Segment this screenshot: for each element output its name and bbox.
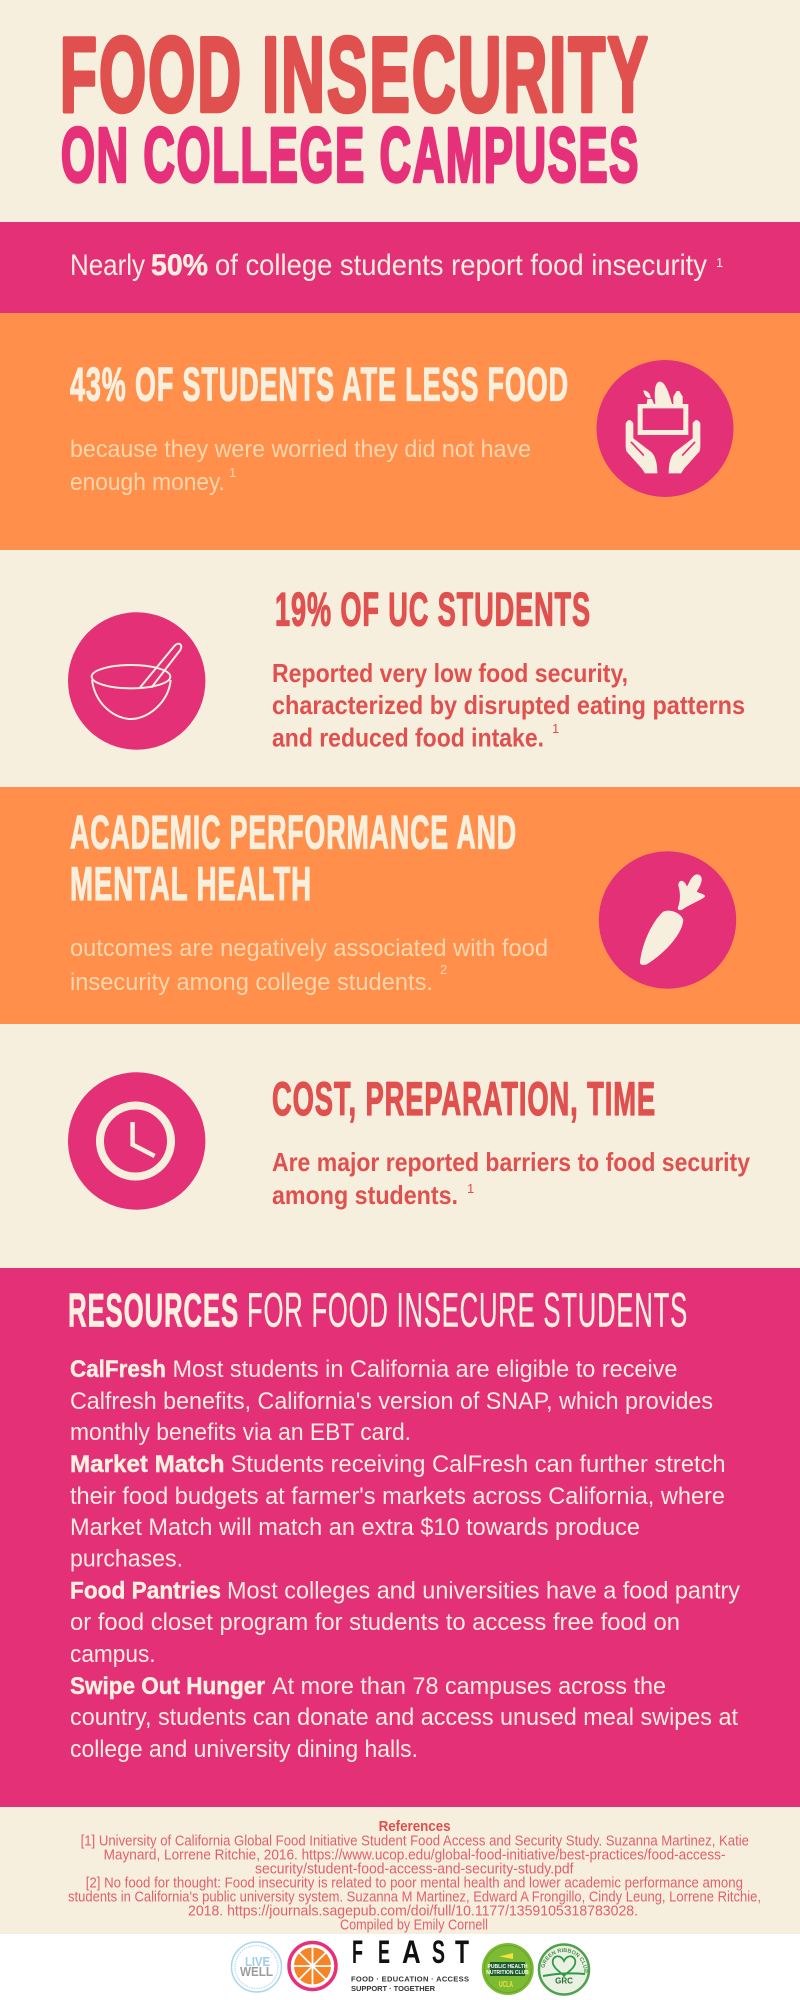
resource: Market Match: purchases. bbox=[70, 1546, 183, 1572]
statistic text: 1 bbox=[716, 255, 723, 270]
heading bbox=[70, 806, 517, 910]
resource: Swipe Out Hunger: country, students can donate and access unused meal swipes at bbox=[70, 1704, 738, 1731]
compiled by credit: Compiled by Emily Cornell bbox=[340, 1916, 488, 1933]
reference 1 bbox=[81, 1833, 749, 1878]
statistic text: Nearly bbox=[70, 249, 145, 282]
panel: title bbox=[0, 0, 800, 222]
logo: Live Well: LIVE bbox=[245, 1954, 270, 1969]
logo: Live Well bbox=[232, 1942, 282, 1992]
icon: bowl and spoon bbox=[68, 612, 205, 750]
logo: FEAST: S bbox=[432, 1934, 445, 1970]
resource: Swipe Out Hunger: Swipe Out Hunger bbox=[70, 1673, 265, 1700]
description text: 2 bbox=[440, 962, 447, 977]
panel: 50% statistic banner bbox=[0, 222, 800, 313]
description text: 1 bbox=[552, 721, 559, 736]
icon: carrot bbox=[599, 851, 736, 989]
panel: resources bbox=[0, 1268, 800, 1807]
resources heading: RESOURCES bbox=[68, 1284, 239, 1336]
heading: MENTAL HEALTH bbox=[70, 857, 312, 910]
icon: hands holding groceries bbox=[596, 360, 734, 497]
logo: FEAST bbox=[351, 1934, 469, 1993]
panel: 43% of students bbox=[0, 313, 800, 550]
panel: cost, preparation, time bbox=[0, 1024, 800, 1268]
resource: Market Match: their food budgets at farmer's markets across California, where bbox=[70, 1483, 725, 1510]
logo: Public Health Nutrition Club bbox=[482, 1943, 534, 1995]
description text: outcomes are negatively associated with food bbox=[70, 935, 548, 962]
description text: Reported very low food security, bbox=[272, 658, 628, 688]
reference 2 bbox=[68, 1874, 761, 1919]
panel: references bbox=[0, 1807, 800, 1934]
description text bbox=[272, 1147, 750, 1210]
resource: Market Match bbox=[70, 1451, 726, 1572]
logo row bbox=[230, 1934, 590, 1996]
logo: Public Health Nutrition Club: PUBLIC HEALTH bbox=[488, 1964, 528, 1970]
logo: FEAST: T bbox=[455, 1934, 469, 1970]
resource: Food Pantries: or food closet program for students to access free food on bbox=[70, 1609, 680, 1636]
references heading: References bbox=[379, 1818, 451, 1835]
logo: FEAST: SUPPORT · TOGETHER bbox=[351, 1984, 436, 1993]
description text bbox=[70, 436, 531, 496]
resource: Market Match: Market Match will match an extra $10 towards produce bbox=[70, 1514, 640, 1541]
resource: Swipe Out Hunger: At more than 78 campuses across the bbox=[272, 1673, 666, 1700]
panel: academic performance and mental health bbox=[0, 787, 800, 1024]
logo: Green Ribbon Club: GRC bbox=[555, 1976, 573, 1986]
resource: Swipe Out Hunger bbox=[70, 1673, 738, 1763]
description text: enough money. bbox=[70, 469, 225, 496]
description text: because they were worried they did not have bbox=[70, 436, 531, 463]
reference 1: Maynard, Lorrene Ritchie, 2016. https://www.ucop.edu/global-food-initiative/best-practices/food-access- bbox=[104, 1847, 726, 1864]
description text: 1 bbox=[229, 465, 236, 480]
icon: clock bbox=[68, 1072, 205, 1210]
resource: Food Pantries bbox=[70, 1578, 740, 1668]
resource: Food Pantries: Most colleges and universities have a food pantry bbox=[227, 1578, 740, 1604]
description text: Are major reported barriers to food security bbox=[272, 1147, 750, 1177]
logo: FEAST: A bbox=[402, 1934, 421, 1970]
logo: FEAST: FOOD · EDUCATION · ACCESS bbox=[351, 1975, 469, 1984]
reference 2: 2018. https://journals.sagepub.com/doi/full/10.1177/1359105318783028. bbox=[188, 1902, 638, 1919]
resource: Food Pantries: Food Pantries bbox=[70, 1578, 221, 1604]
logo: FEAST: E bbox=[378, 1934, 390, 1970]
logo: Live Well: WELL bbox=[240, 1964, 273, 1979]
logo: orange slice bbox=[289, 1942, 336, 1990]
description text: among students. bbox=[272, 1180, 458, 1210]
logo: FEAST: F bbox=[352, 1934, 363, 1970]
panel: 19% of UC students bbox=[0, 550, 800, 787]
logo: Green Ribbon Club bbox=[538, 1943, 590, 1996]
statistic text: 50% bbox=[151, 249, 208, 282]
resource: CalFresh: Most students in California are eligible to receive bbox=[172, 1356, 678, 1383]
resource: CalFresh: Calfresh benefits, California's version of SNAP, which provides bbox=[70, 1388, 713, 1415]
resource: Food Pantries: campus. bbox=[70, 1641, 156, 1668]
description text: and reduced food intake. bbox=[272, 722, 544, 752]
resource: Swipe Out Hunger: college and university dining halls. bbox=[70, 1736, 418, 1763]
description text: insecurity among college students. bbox=[70, 969, 433, 996]
logo: Public Health Nutrition Club: NUTRITION CLUB bbox=[486, 1970, 529, 1976]
resource: CalFresh: monthly benefits via an EBT card. bbox=[70, 1419, 411, 1446]
resource: Market Match: Students receiving CalFresh can further stretch bbox=[231, 1451, 726, 1478]
description text bbox=[70, 935, 548, 996]
statistic text: of college students report food insecurity bbox=[215, 249, 707, 282]
resource: CalFresh bbox=[70, 1356, 713, 1446]
resource: CalFresh: CalFresh bbox=[70, 1356, 166, 1383]
logo: Green Ribbon Club: GREEN RIBBON CLUB bbox=[541, 1948, 588, 1973]
resource: Market Match: Market Match bbox=[70, 1451, 224, 1478]
description text: characterized by disrupted eating patterns bbox=[272, 690, 745, 720]
resources heading bbox=[68, 1284, 688, 1338]
description text: 1 bbox=[467, 1181, 474, 1196]
logo: Public Health Nutrition Club: UCLA bbox=[499, 1980, 513, 1989]
reference 1: security/student-food-access-and-security-study.pdf bbox=[255, 1861, 574, 1878]
description text bbox=[272, 658, 745, 752]
